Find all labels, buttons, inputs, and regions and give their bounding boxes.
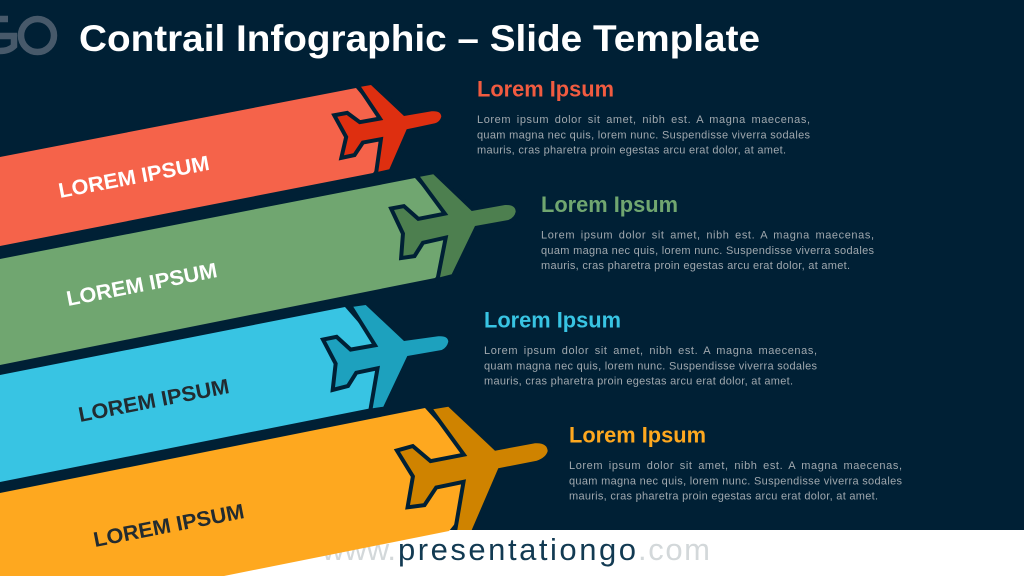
body 4: quam magna nec quis, lorem nunc. Suspendisse viverra sodales (569, 476, 902, 488)
title: Contrail Infographic – Slide Template (79, 18, 760, 59)
body 2: mauris, cras pharetra proin egestas arcu erat dolor, at amet. (541, 260, 850, 272)
body 3: mauris, cras pharetra proin egestas arcu erat dolor, at amet. (484, 376, 793, 388)
body 3: quam magna nec quis, lorem nunc. Suspendisse viverra sodales (484, 360, 818, 372)
body 4 (569, 460, 902, 502)
heading 4: Lorem Ipsum (569, 422, 706, 448)
footer bar (0, 530, 1024, 576)
ribbon 2: green contrail (0, 174, 516, 365)
footer url (321, 532, 710, 567)
footer url: .com (638, 532, 710, 567)
icon: green plane (394, 174, 516, 277)
footer url: www. (321, 532, 396, 567)
logo: GO mark (0, 19, 54, 52)
body 3 (484, 345, 818, 388)
label 4: LOREM IPSUM (92, 500, 246, 552)
label 3: LOREM IPSUM (77, 375, 231, 427)
heading 3: Lorem Ipsum (484, 308, 621, 332)
body 4: Lorem ipsum dolor sit amet, nibh est. A magna maecenas, (569, 460, 902, 472)
icon: orange plane (400, 407, 548, 530)
body 1: mauris, cras pharetra proin egestas arcu erat dolor, at amet. (477, 144, 786, 156)
body 1 (477, 114, 810, 156)
body 2 (541, 230, 874, 272)
icon: red plane (337, 85, 441, 172)
text block 4 (569, 422, 902, 502)
icon: blue plane (326, 305, 448, 408)
body 2: quam magna nec quis, lorem nunc. Suspendisse viverra sodales (541, 245, 874, 257)
body 1: quam magna nec quis, lorem nunc. Suspendisse viverra sodales (477, 130, 810, 142)
ribbon 1: red contrail (0, 85, 441, 246)
text block 3 (484, 308, 818, 388)
ribbon 4: orange contrail (0, 407, 548, 576)
text block 1 (477, 76, 810, 156)
label 2: LOREM IPSUM (65, 259, 219, 311)
body 1: Lorem ipsum dolor sit amet, nibh est. A magna maecenas, (477, 114, 810, 126)
text block 2 (541, 192, 874, 272)
ribbon 3: blue contrail (0, 305, 448, 482)
heading 1: Lorem Ipsum (477, 76, 614, 102)
label 1: LOREM IPSUM (57, 152, 211, 203)
body 4: mauris, cras pharetra proin egestas arcu erat dolor, at amet. (569, 490, 878, 502)
body 3: Lorem ipsum dolor sit amet, nibh est. A magna maecenas, (484, 345, 817, 357)
heading 2: Lorem Ipsum (541, 192, 678, 217)
footer url: presentationgo (398, 532, 636, 567)
body 2: Lorem ipsum dolor sit amet, nibh est. A magna maecenas, (541, 230, 874, 242)
